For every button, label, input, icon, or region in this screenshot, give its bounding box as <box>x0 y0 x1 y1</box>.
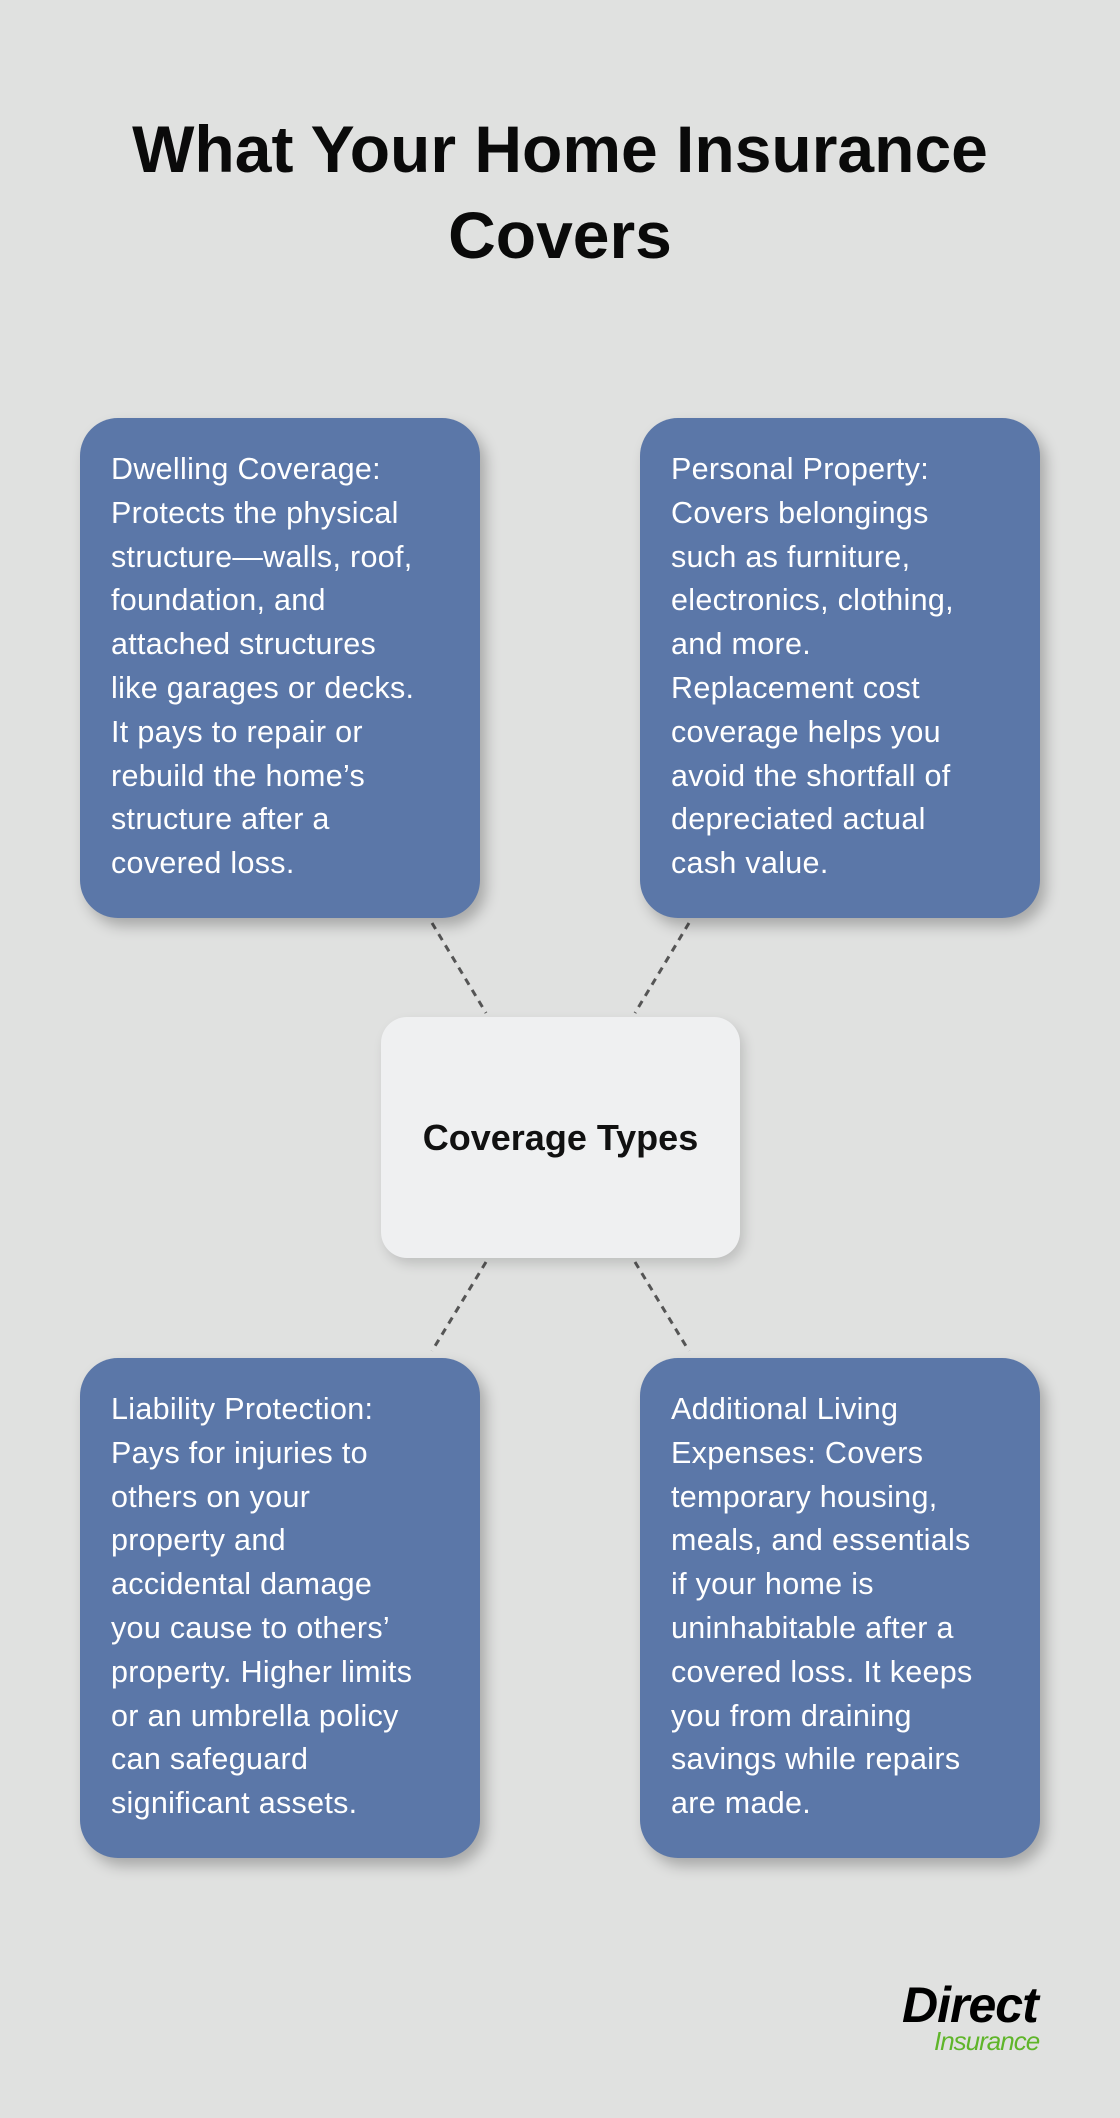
panel: personal property: Covers belongings <box>671 496 929 530</box>
panel: liability protection: or an umbrella policy <box>111 1699 399 1733</box>
center node: coverage types <box>381 1017 740 1258</box>
title <box>132 112 988 272</box>
panel: liability protection: significant assets. <box>111 1786 357 1820</box>
panel: additional living expenses: are made. <box>671 1786 811 1820</box>
panel: dwelling coverage: Protects the physical <box>111 496 399 530</box>
panel: personal property: such as furniture, <box>671 540 910 574</box>
panel: personal property: and more. <box>671 627 811 661</box>
panel: personal property: avoid the shortfall of <box>671 759 951 793</box>
panel: dwelling coverage: like garages or decks. <box>111 671 414 705</box>
panel: additional living expenses: meals, and essentials <box>671 1523 971 1557</box>
panel: additional living expenses: uninhabitable after a <box>671 1611 954 1645</box>
panel: additional living expenses: temporary housing, <box>671 1480 937 1514</box>
title: What Your Home Insurance <box>132 112 988 186</box>
panel: dwelling coverage: foundation, and <box>111 583 326 617</box>
panel: dwelling coverage: It pays to repair or <box>111 715 363 749</box>
panel: dwelling coverage: structure after a <box>111 802 330 836</box>
panel: personal property: Personal Property: <box>671 452 929 486</box>
panel: additional living expenses <box>640 1358 1040 1858</box>
panel: liability protection: others on your <box>111 1480 310 1514</box>
logo: Insurance <box>934 2026 1039 2056</box>
panel: liability protection: you cause to others’ <box>111 1611 390 1645</box>
center node: coverage types: Coverage Types <box>423 1116 698 1158</box>
panel: personal property <box>640 418 1040 918</box>
panel: additional living expenses: you from draining <box>671 1699 912 1733</box>
panel: liability protection: accidental damage <box>111 1567 372 1601</box>
panel: liability protection <box>80 1358 480 1858</box>
panel: additional living expenses: Expenses: Covers <box>671 1436 923 1470</box>
panel: dwelling coverage: covered loss. <box>111 846 295 880</box>
panel: dwelling coverage <box>80 418 480 918</box>
panel: personal property: coverage helps you <box>671 715 941 749</box>
panel: dwelling coverage: attached structures <box>111 627 376 661</box>
panel: additional living expenses: if your home is <box>671 1567 874 1601</box>
panel: additional living expenses: Additional Living <box>671 1392 898 1426</box>
panel: liability protection: Pays for injuries to <box>111 1436 368 1470</box>
panel: dwelling coverage: structure—walls, roof, <box>111 540 413 574</box>
panel: dwelling coverage: Dwelling Coverage: <box>111 452 381 486</box>
panel: dwelling coverage: rebuild the home’s <box>111 759 365 793</box>
panel: liability protection: Liability Protection: <box>111 1392 373 1426</box>
panel: liability protection: property. Higher limits <box>111 1655 412 1689</box>
panel: personal property: Replacement cost <box>671 671 920 705</box>
panel: additional living expenses: covered loss. It keeps <box>671 1655 973 1689</box>
panel: personal property: electronics, clothing, <box>671 583 954 617</box>
logo <box>902 1977 1040 2056</box>
panel: personal property: cash value. <box>671 846 829 880</box>
logo: Direct <box>902 1977 1038 2033</box>
panel: additional living expenses: savings while repairs <box>671 1742 960 1776</box>
panel: liability protection: property and <box>111 1523 286 1557</box>
panel: liability protection: can safeguard <box>111 1742 308 1776</box>
panel: personal property: depreciated actual <box>671 802 926 836</box>
title: Covers <box>448 198 672 272</box>
